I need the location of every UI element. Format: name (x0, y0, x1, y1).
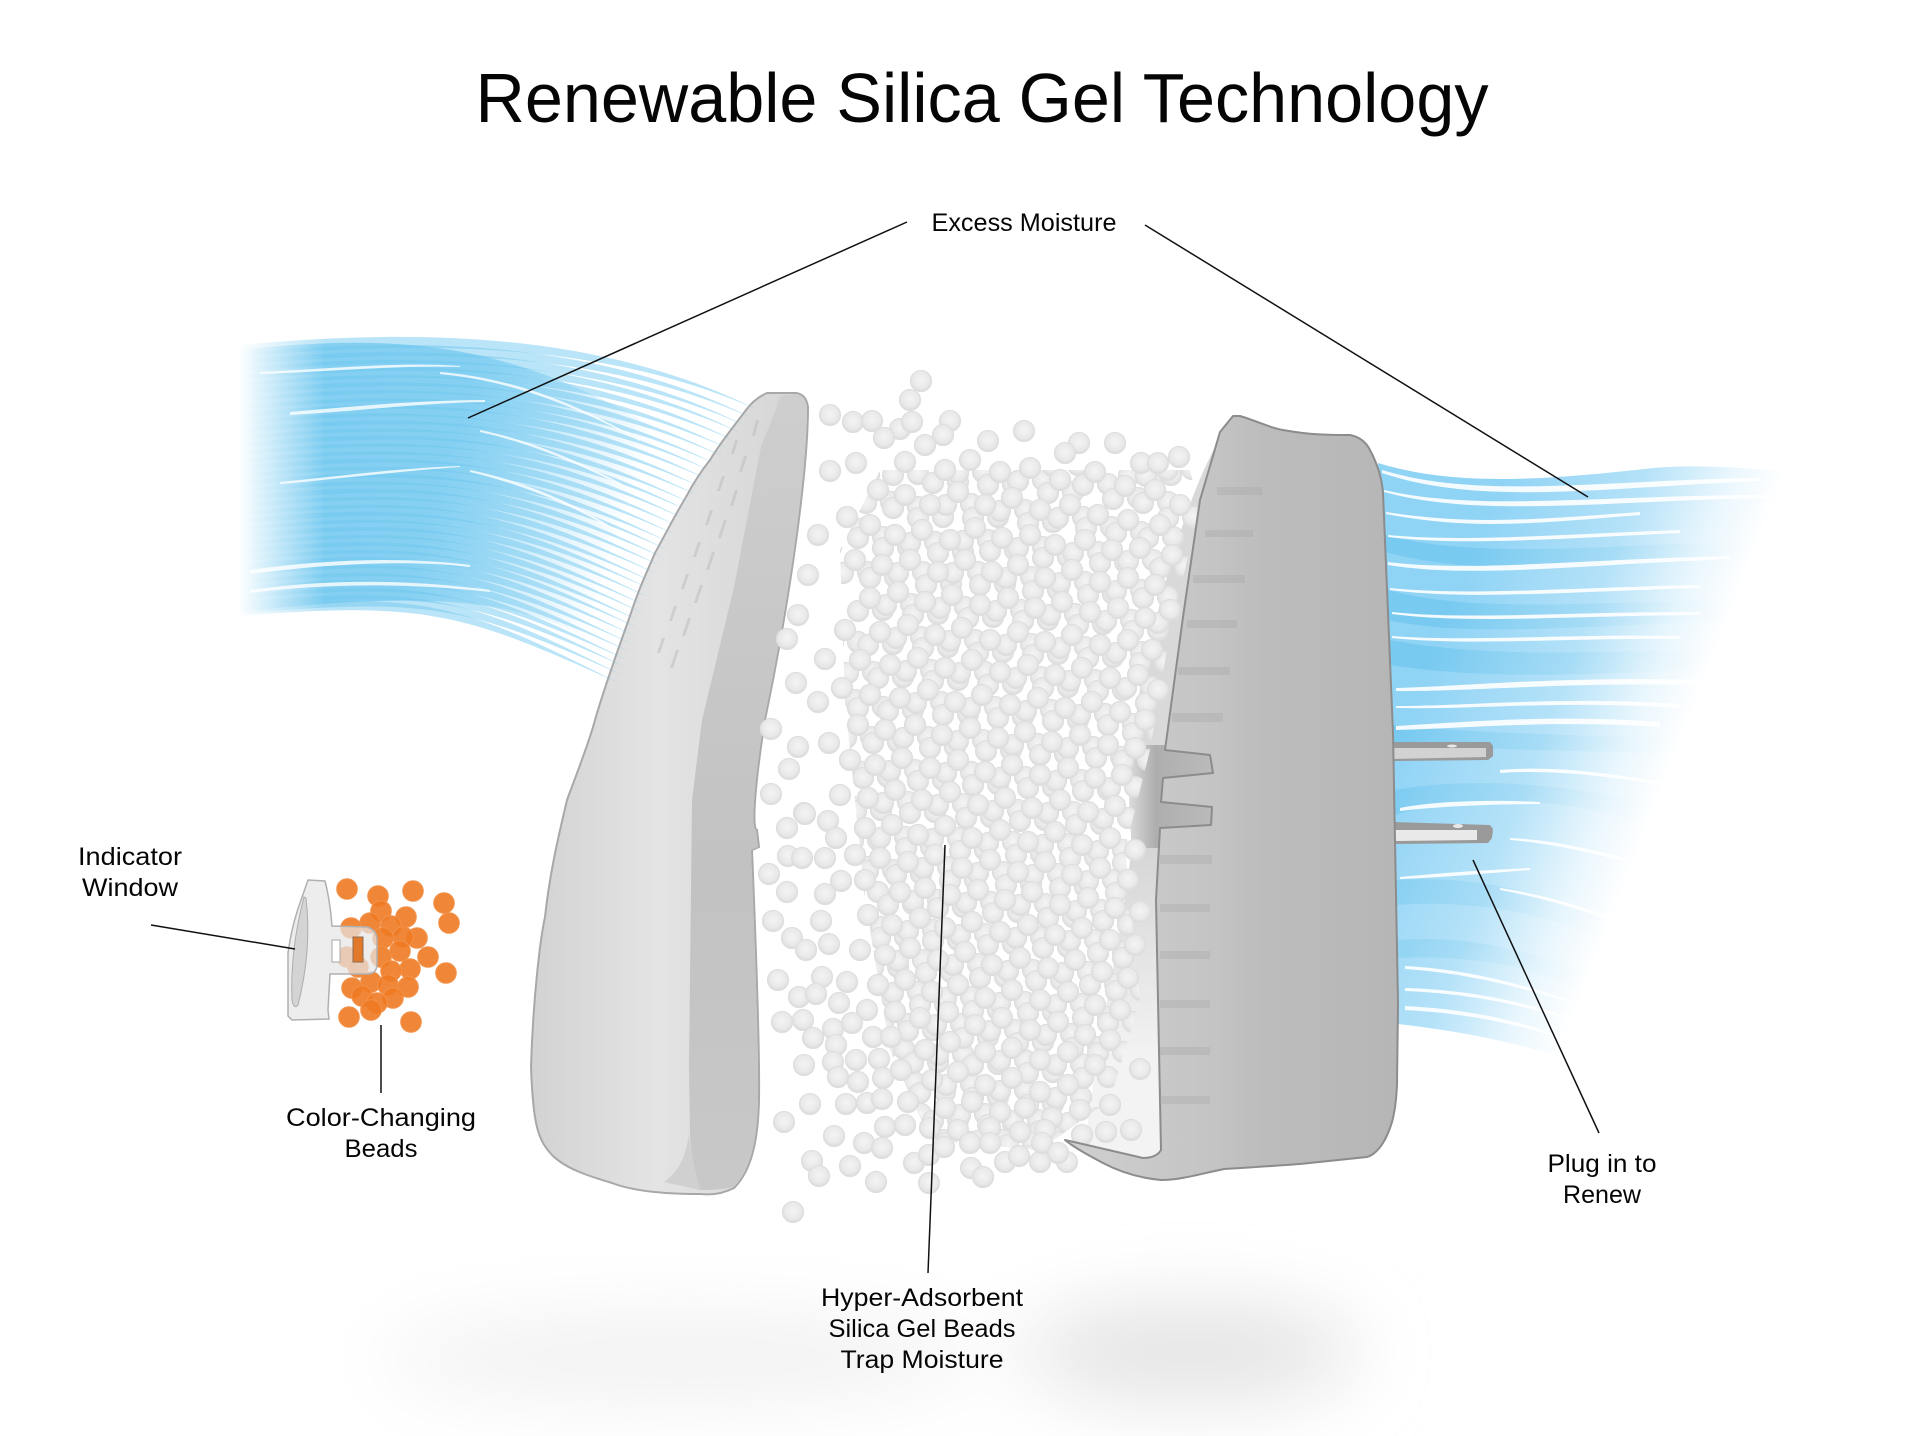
indicator slots (332, 937, 363, 962)
silica gel beads (746, 370, 1204, 1236)
device: left front cover (531, 393, 808, 1194)
label: color-changing beads: Beads (344, 1135, 418, 1163)
label: indicator window (78, 843, 182, 902)
dense bead layer (840, 470, 1198, 1150)
label: hyper-adsorbent beads: Trap Moisture (840, 1346, 1004, 1374)
moisture stream: right outflow (1378, 463, 1765, 1050)
plug prong: upper (1392, 742, 1493, 761)
moisture stream: left inflow (240, 337, 758, 683)
title: Renewable Silica Gel Technology (476, 59, 1488, 137)
label: plug in to renew: Renew (1563, 1181, 1642, 1209)
front bead layer (758, 370, 1191, 1223)
device: rear housing with prongs (1065, 416, 1493, 1180)
label: hyper-adsorbent beads: Silica Gel Beads (828, 1315, 1016, 1343)
housing body (1065, 416, 1398, 1180)
label: indicator window: Window (82, 874, 179, 902)
indicator window part with orange beads (288, 879, 459, 1032)
label: plug in to renew: Plug in to (1548, 1150, 1656, 1178)
leader lines (151, 222, 1599, 1273)
orange color-changing beads (337, 879, 459, 1032)
floor shadows (380, 1304, 1360, 1400)
label: color-changing beads (286, 1104, 476, 1163)
label: excess moisture: Excess Moisture (932, 209, 1116, 237)
plug prong: lower (1394, 822, 1493, 844)
label: color-changing beads: Color-Changing (286, 1104, 476, 1132)
label: hyper-adsorbent beads: Hyper-Adsorbent (821, 1284, 1023, 1312)
label: indicator window: Indicator (78, 843, 182, 871)
label: hyper-adsorbent beads (821, 1284, 1023, 1374)
label: plug in to renew (1548, 1150, 1656, 1209)
indicator housing (288, 880, 377, 1020)
device: rear housing cavity (1085, 420, 1250, 1158)
housing ribs (1160, 487, 1262, 1104)
